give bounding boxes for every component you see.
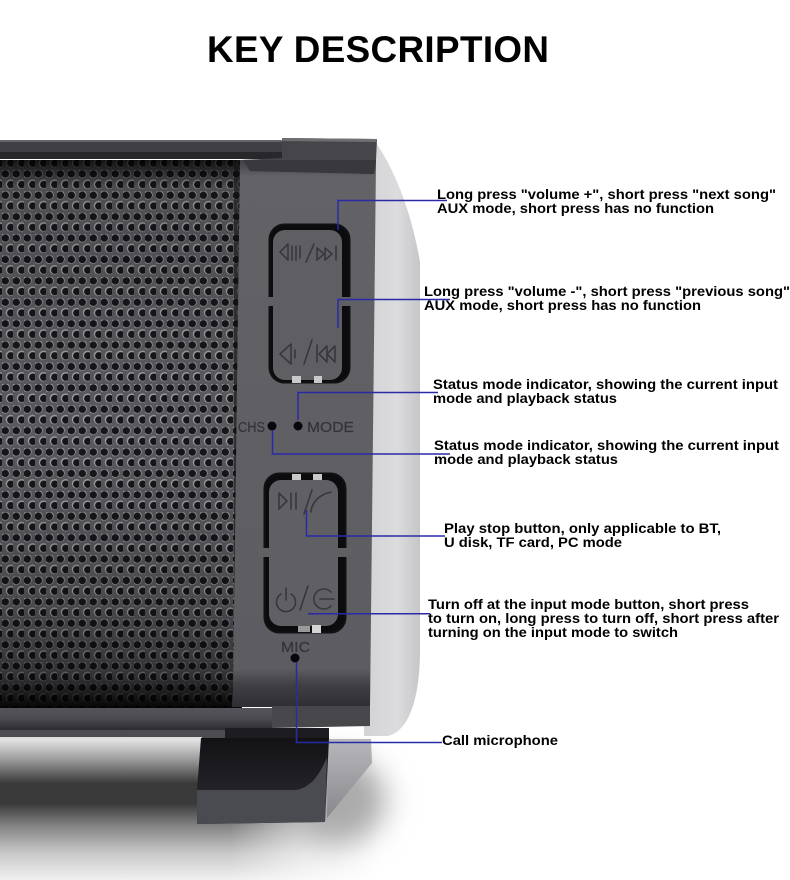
top end cap xyxy=(240,138,377,174)
callout: status indicator 2: Status mode indicator, showing the current input xyxy=(434,438,779,454)
mic dot xyxy=(290,654,300,662)
callout: power and input: to turn on, long press to turn off, short press after xyxy=(428,611,779,627)
mode dot xyxy=(294,422,302,430)
mode and channel indicators xyxy=(238,420,354,436)
top rail xyxy=(0,140,282,159)
icon: power and input xyxy=(276,586,334,612)
callout: power and input: turning on the input mode to switch xyxy=(428,625,678,641)
callout: play stop: Play stop button, only applicable to BT, xyxy=(444,521,721,537)
callout: power and input: Turn off at the input mode button, short press xyxy=(428,597,749,613)
title: KEY DESCRIPTION xyxy=(207,29,549,70)
callout: status indicator 2: mode and playback status xyxy=(434,452,618,468)
soft shadow beside stand xyxy=(290,758,386,842)
icon: volume down and previous xyxy=(280,340,335,364)
callout: play stop: U disk, TF card, PC mode xyxy=(444,535,622,551)
bottom rail xyxy=(0,708,272,730)
silver side of speaker xyxy=(364,140,420,736)
callout: volume down: AUX mode, short press has no function xyxy=(424,298,701,314)
CHS dot xyxy=(268,422,276,430)
button 1: volume up xyxy=(264,224,354,383)
callout: volume up: AUX mode, short press has no function xyxy=(437,201,714,217)
CHS label: CHS xyxy=(238,420,265,436)
floor shadow xyxy=(0,738,380,880)
icon: previous and next xyxy=(280,244,336,262)
speaker product photo xyxy=(0,138,420,880)
stand foot xyxy=(197,738,329,824)
icon: play pause and call xyxy=(279,490,331,514)
speaker mesh grille xyxy=(0,160,242,709)
leader lines xyxy=(272,200,450,742)
callout: status mode indicator: mode and playback status xyxy=(433,391,617,407)
callout: volume down: Long press "volume -", short press "previous song" xyxy=(424,284,790,300)
callout: volume up: Long press "volume +", short press "next song" xyxy=(437,187,776,203)
button 2: play and power xyxy=(258,474,352,633)
callout: status mode indicator: Status mode indicator, showing the current input xyxy=(433,377,778,393)
MIC label: MIC xyxy=(281,640,310,656)
stand light side xyxy=(327,739,372,818)
side panel xyxy=(232,160,376,707)
bottom end cap xyxy=(272,706,370,728)
callout: microphone: Call microphone xyxy=(442,733,558,749)
MODE label: MODE xyxy=(307,420,354,436)
